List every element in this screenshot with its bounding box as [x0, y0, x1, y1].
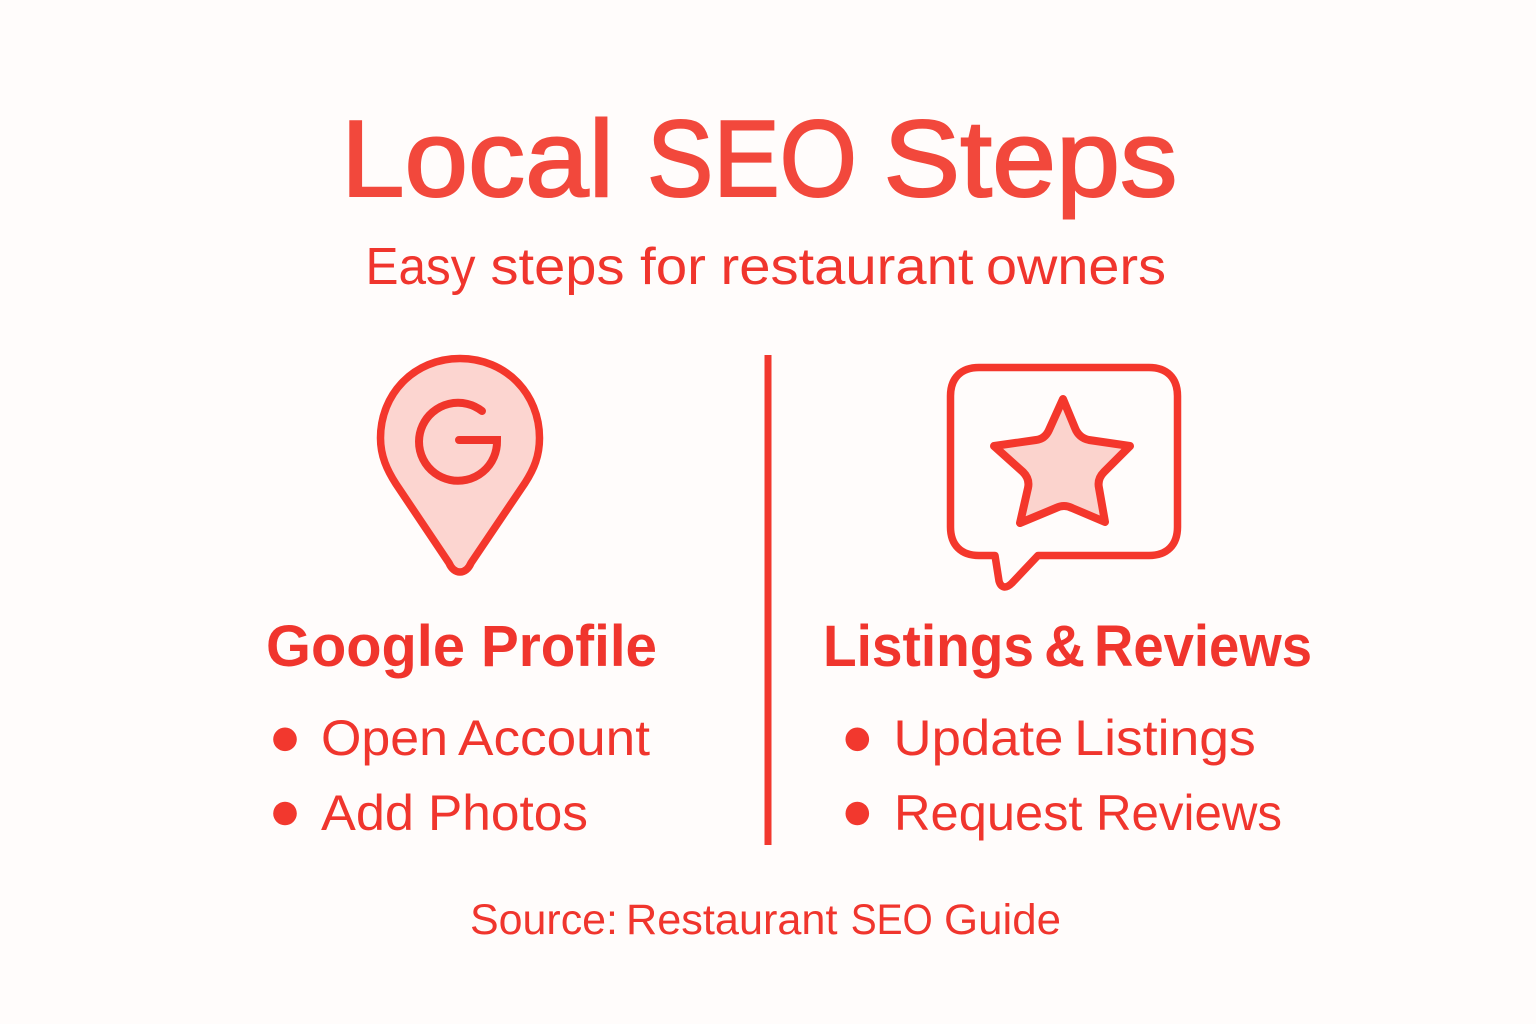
panel: Listings & Reviews: [823, 614, 1312, 841]
icon: Google map pin: [380, 358, 540, 572]
bullet: Update Listings: Update: [894, 710, 1064, 766]
heading: Listings & Reviews: Listings: [823, 614, 1034, 679]
bullet: Add Photos: [273, 785, 588, 841]
title: Local: [341, 98, 614, 220]
bullet: Update Listings: Listings: [1074, 710, 1256, 766]
source note: SEO: [851, 896, 933, 944]
subtitle: Easy: [366, 238, 476, 296]
subtitle: for: [640, 238, 706, 296]
heading: Google Profile: Google: [266, 614, 465, 679]
title: SEO: [647, 98, 857, 220]
subtitle: owners: [986, 238, 1166, 296]
bullet: Open Account: [273, 710, 650, 766]
heading: Google Profile: Profile: [481, 614, 657, 679]
subtitle: restaurant: [720, 238, 974, 296]
bullet: Request Reviews: [846, 785, 1282, 841]
bullet: Open Account: Account: [458, 710, 650, 766]
subtitle: steps: [490, 238, 624, 296]
bullet: Update Listings: [846, 710, 1256, 766]
panel: Google Profile: [266, 614, 657, 841]
bullet: Open Account: Open: [321, 710, 448, 766]
heading: Listings & Reviews: Reviews: [1094, 614, 1312, 679]
title: Steps: [884, 98, 1178, 220]
heading: Listings & Reviews: &: [1044, 614, 1085, 679]
bullet: Add Photos: Photos: [428, 785, 588, 841]
source note: Restaurant: [626, 896, 838, 944]
source note: Guide: [944, 896, 1061, 944]
divider: [764, 355, 772, 845]
bullet: Request Reviews: Request: [894, 785, 1083, 841]
icon: review speech bubble with star: [950, 368, 1178, 587]
bullet: Add Photos: Add: [321, 785, 414, 841]
source note: Source:: [470, 896, 618, 944]
bullet: Request Reviews: Reviews: [1096, 785, 1282, 841]
